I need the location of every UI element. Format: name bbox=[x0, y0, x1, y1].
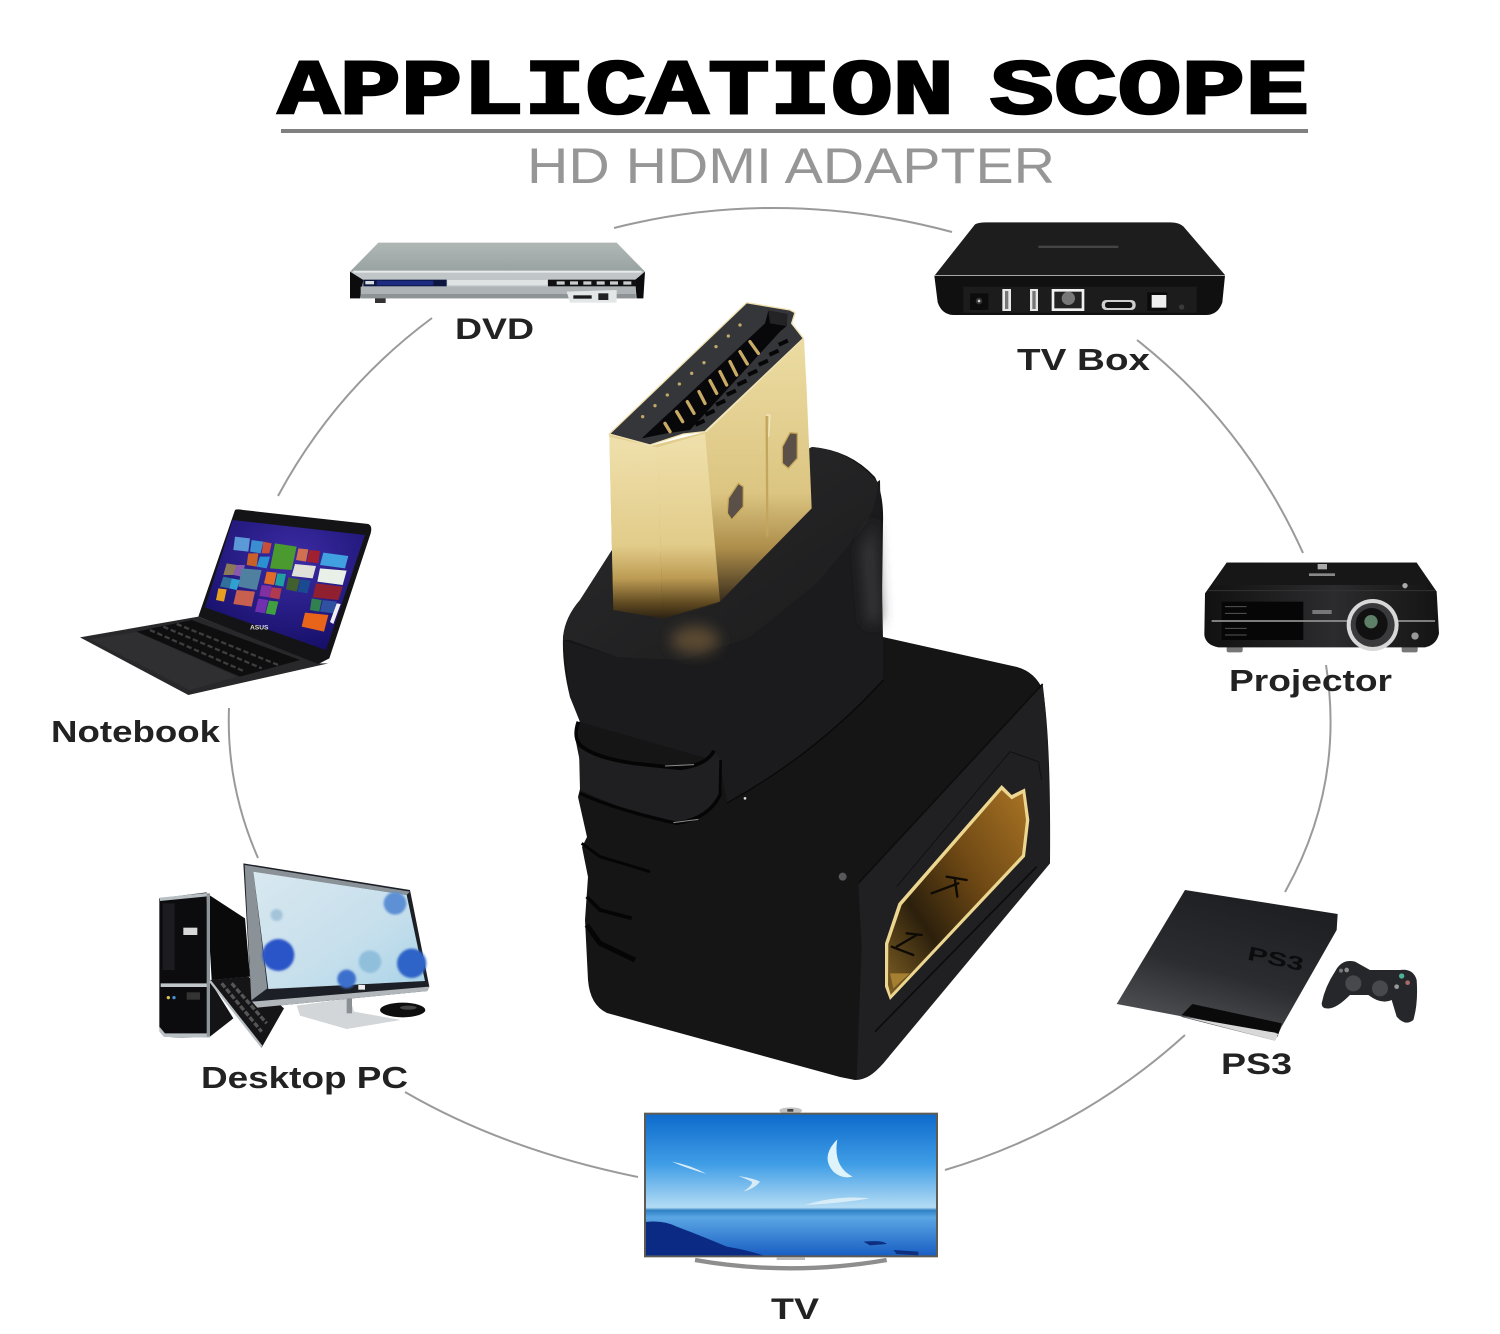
female port bbox=[885, 785, 1029, 1000]
device: TV bbox=[644, 1107, 938, 1268]
plug top face bbox=[609, 303, 803, 445]
label: Projector: Projector bbox=[1229, 663, 1392, 698]
device: PS3 with controller: PS3 bbox=[1246, 944, 1306, 976]
label: TV: TV bbox=[771, 1293, 819, 1326]
adapter front face bbox=[576, 680, 1050, 1079]
subtitle: HD HDMI ADAPTER bbox=[527, 138, 1055, 194]
adapter collar top face bbox=[563, 447, 878, 660]
adapter body silhouette bbox=[563, 447, 1050, 1080]
label: Desktop PC: Desktop PC bbox=[201, 1060, 408, 1095]
adapter strap and ribs bbox=[576, 680, 883, 960]
device: desktop PC bbox=[159, 863, 429, 1048]
label: PS3: PS3 bbox=[1221, 1048, 1292, 1081]
title bbox=[278, 49, 1309, 137]
plug gold shell bbox=[609, 338, 812, 618]
label: DVD: DVD bbox=[455, 313, 534, 346]
device: PS3 with controller bbox=[1117, 890, 1417, 1041]
adapter collar side bbox=[563, 480, 883, 803]
HDMI adapter bbox=[563, 303, 1050, 1080]
label: Notebook: Notebook bbox=[51, 714, 221, 749]
device: notebook bbox=[80, 509, 371, 695]
device: TV box bbox=[934, 222, 1225, 315]
device: notebook: ASUS bbox=[250, 624, 269, 631]
title: SCOPE bbox=[990, 49, 1309, 137]
label: TV Box: TV Box bbox=[1017, 342, 1151, 377]
title underline bbox=[281, 129, 1308, 133]
title: APPLICATION bbox=[278, 49, 954, 137]
device: DVD player bbox=[350, 243, 645, 303]
connecting ring bbox=[229, 208, 1331, 1177]
adapter highlights bbox=[671, 520, 880, 654]
plug bbox=[609, 303, 812, 618]
device: projector bbox=[1204, 563, 1439, 652]
